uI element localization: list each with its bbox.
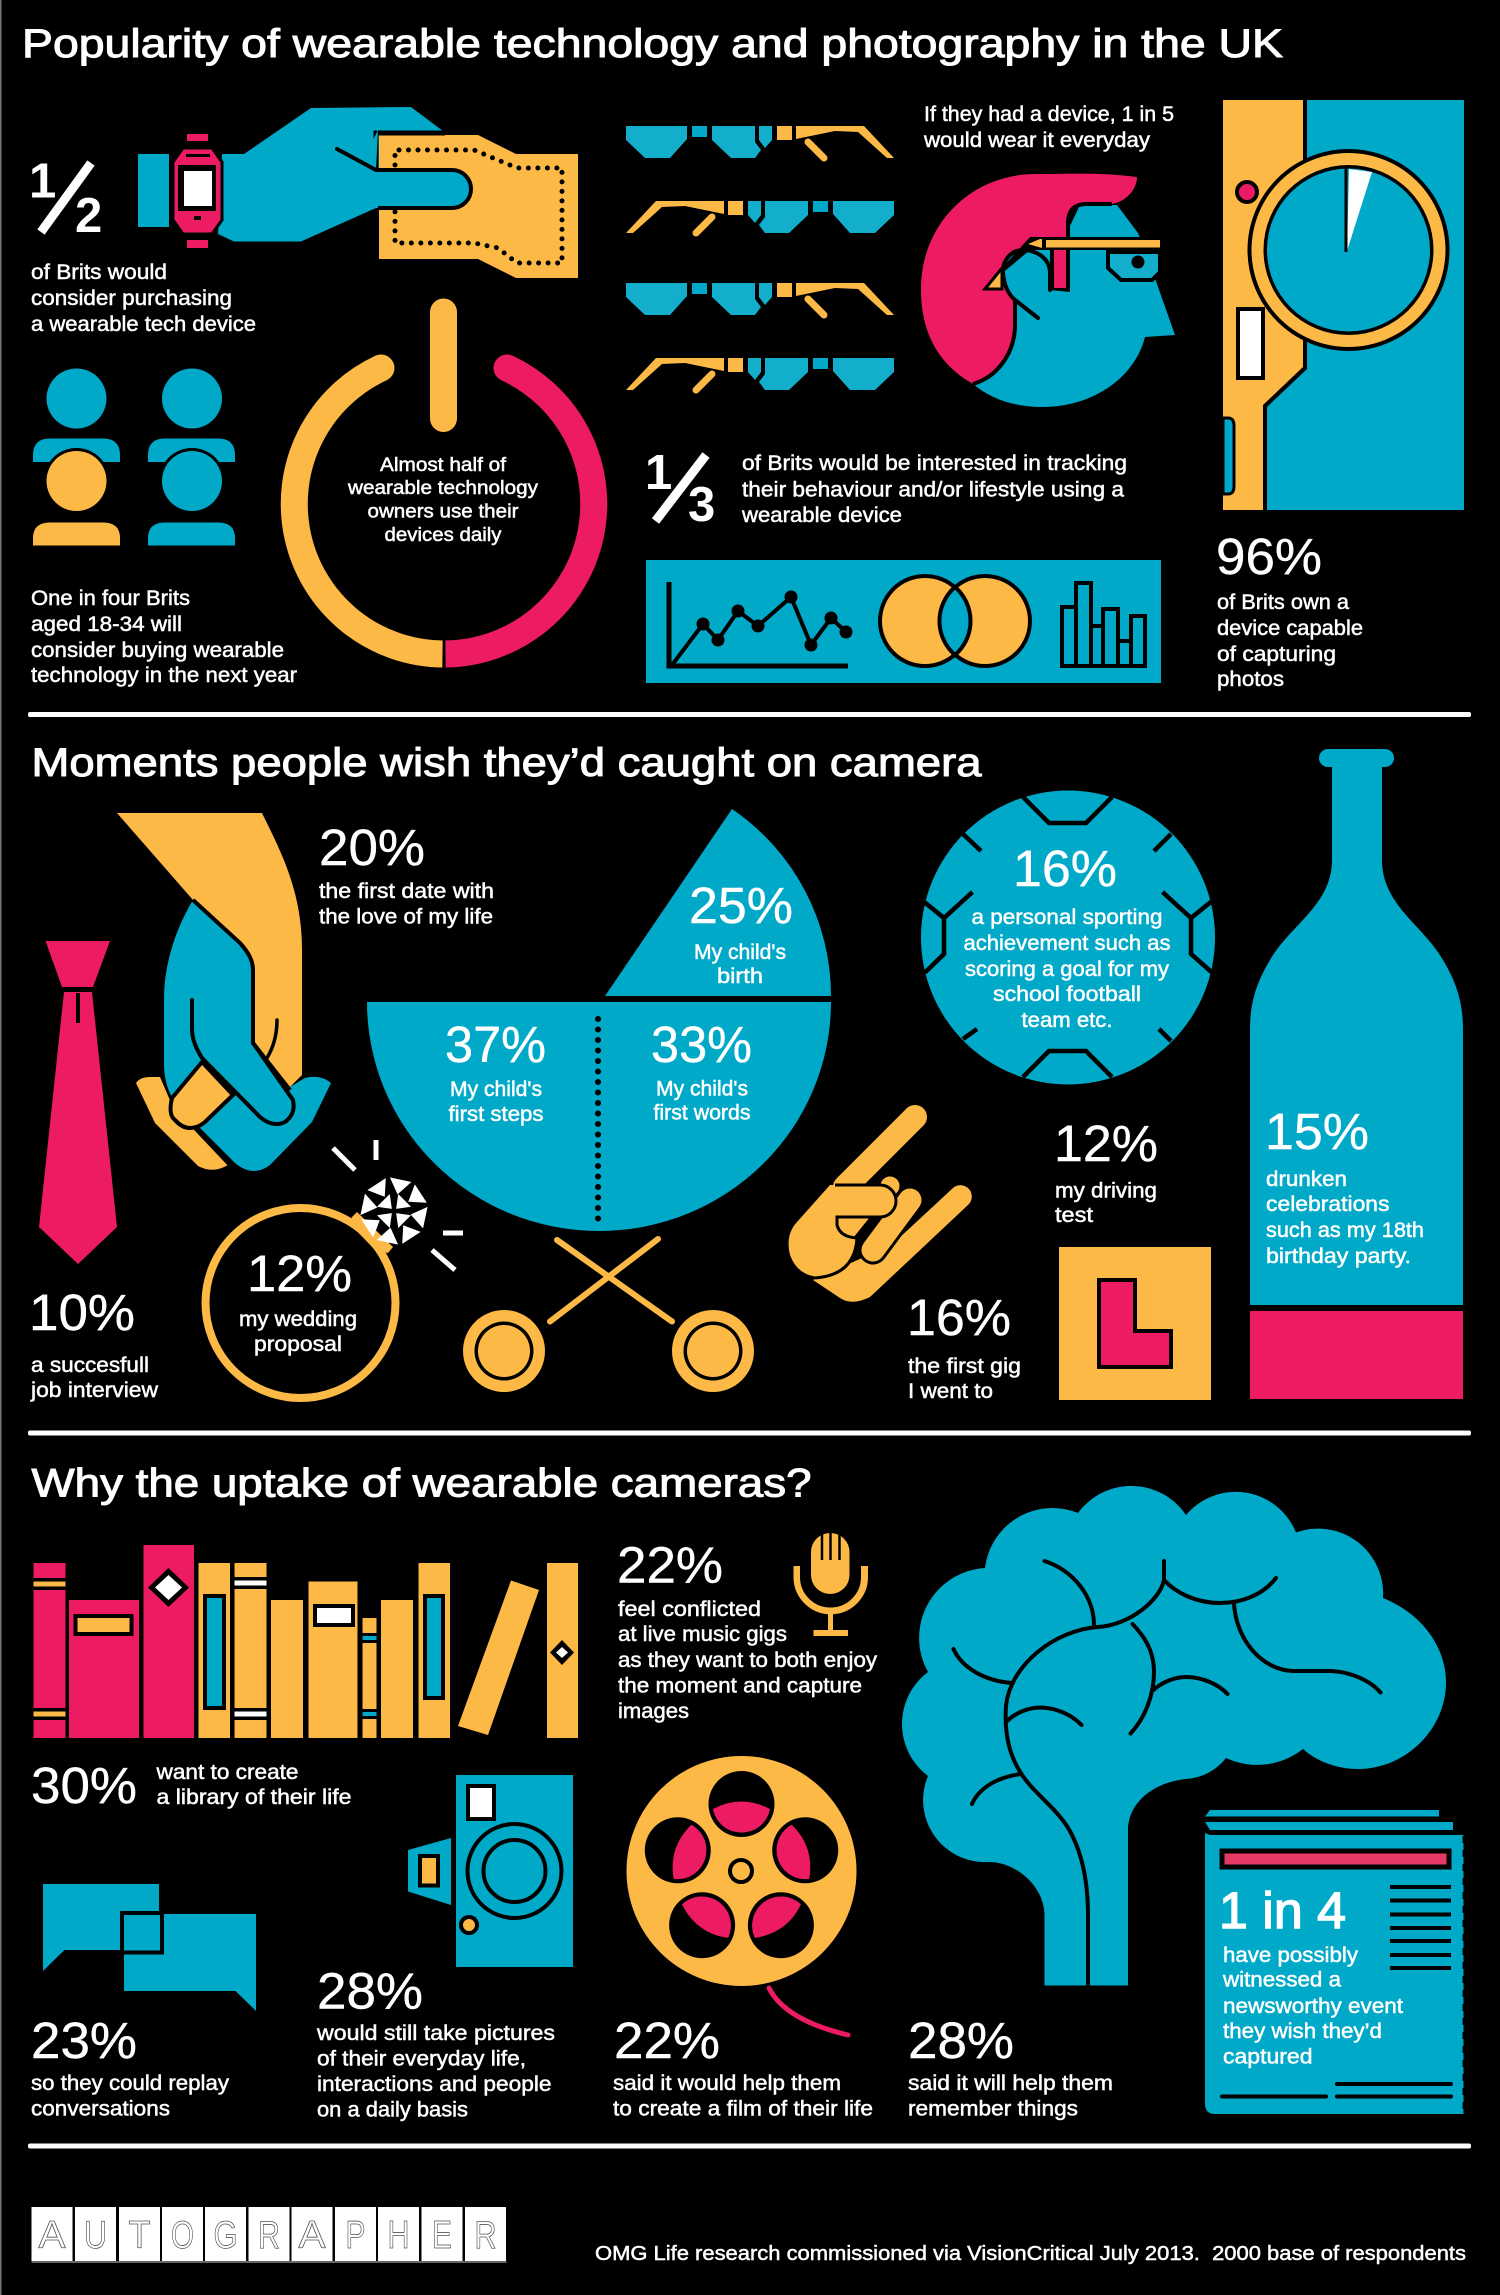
icon: newspaper: [1205, 1810, 1465, 2114]
stat: 12 percent driving test: test: [1055, 1204, 1093, 1227]
text: daily use: Almost half of: [380, 455, 507, 476]
icon: head wearing smart glasses: [921, 174, 1175, 407]
stat: 16 percent sporting achievement: a personal sporting: [972, 906, 1162, 929]
stat: 16 percent sporting achievement: scoring a goal for my: [965, 958, 1170, 981]
stat: 12 percent wedding proposal: [239, 1245, 357, 1356]
stat: 25 percent birth: My child's: [694, 941, 786, 964]
stat: 1 in 4 newsworthy event: captured: [1223, 2046, 1312, 2068]
stat: 1 in 4 newsworthy event: [1219, 1882, 1403, 2068]
stat: 33 percent first words: first words: [654, 1102, 750, 1124]
text: daily use: wearable technology: [347, 478, 539, 499]
stat: 20 percent first date: 20%: [319, 819, 425, 876]
footer: source note: OMG Life research commissioned via VisionCritical July 2013. 2000 base of respondents: [595, 2243, 1466, 2265]
heading: moments: Moments people wish they’d caught on camera: [32, 741, 982, 785]
stat: 22 percent live music gigs: feel conflicted: [618, 1598, 761, 1621]
stat: 22 percent live music gigs: [617, 1536, 878, 1723]
icon: speech bubbles: [43, 1884, 256, 2011]
icon: necktie: [39, 941, 117, 1264]
stat: 30 percent library: [31, 1757, 352, 1814]
stat: 30 percent library: 30%: [31, 1757, 137, 1814]
text: one in five wear everyday: [923, 103, 1174, 152]
icon: microphone: [794, 1532, 867, 1636]
logo: Autographer: O: [171, 2214, 194, 2257]
icon: baby pram shaped pie chart: [367, 809, 831, 1392]
text: one in four Brits: One in four Brits: [31, 587, 190, 610]
stat: 16 percent sporting achievement: achievement such as: [964, 932, 1170, 955]
text: tracking behaviour: their behaviour and/or lifestyle using a: [742, 478, 1124, 502]
stat: 22 percent live music gigs: 22%: [617, 1536, 723, 1594]
text: tracking behaviour: [741, 452, 1127, 527]
logo: Autographer: T: [128, 2214, 150, 2257]
stat: 25 percent birth: 25%: [689, 877, 793, 934]
stat: 37 percent first steps: first steps: [448, 1103, 544, 1126]
stat: 16 percent sporting achievement: 16%: [1013, 840, 1117, 897]
panel: wearable technology popularity: [29, 100, 1464, 691]
stat: 1 in 4 newsworthy event: have possibly: [1223, 1944, 1359, 1967]
stat: 33 percent first words: [651, 1016, 752, 1124]
logo: Autographer: A: [298, 2214, 326, 2257]
icon: wearable camera: [408, 1775, 573, 1967]
stat: 22 percent live music gigs: images: [618, 1700, 689, 1723]
stat: 1 in 4 newsworthy event: witnessed a: [1222, 1968, 1341, 1992]
stat: 16 percent sporting achievement: school football: [993, 983, 1141, 1006]
line chart: [669, 582, 852, 666]
icon: four people, one in four: [33, 368, 235, 546]
stat: 37 percent first steps: [445, 1016, 546, 1126]
stat: 20 percent first date: the love of my life: [319, 906, 493, 928]
logo: Autographer: G: [214, 2214, 238, 2257]
stat: 12 percent driving test: [1054, 1115, 1158, 1227]
text: purchasing wearable tech: of Brits would: [31, 261, 167, 284]
stat: 25 percent birth: birth: [717, 965, 763, 988]
stat: 33 percent first words: My child's: [656, 1078, 748, 1100]
stat: 37 percent first steps: 37%: [445, 1016, 546, 1073]
stat: 10 percent job interview: job interview: [30, 1379, 159, 1402]
stat: 28 percent remember things: remember things: [908, 2098, 1078, 2120]
stat: 22 percent film of their life: 22%: [614, 2012, 720, 2069]
bar chart: [1062, 583, 1145, 666]
fraction one third: [645, 446, 715, 532]
stat: 33 percent first words: 33%: [651, 1016, 752, 1073]
icon: holding hands: [117, 813, 331, 1171]
logo: Autographer: A: [38, 2214, 66, 2257]
stat: 12 percent wedding proposal: 12%: [247, 1245, 352, 1302]
text: daily use: owners use their: [368, 502, 519, 522]
icon: power button ring: [294, 312, 594, 654]
icon: brain: [902, 1486, 1446, 1986]
stat: 28 percent everyday pictures: on a daily basis: [317, 2098, 468, 2122]
stat: 23 percent replay conversations: 23%: [31, 2012, 137, 2069]
text: tracking behaviour: wearable device: [741, 504, 902, 527]
venn diagram: [880, 576, 1030, 666]
logo: Autographer: H: [388, 2214, 410, 2257]
icon: football: [921, 790, 1215, 1084]
text: purchasing wearable tech: consider purchasing: [31, 287, 232, 310]
pram frame and wheels: [463, 1239, 754, 1392]
text: tracking behaviour: of Brits would be interested in tracking: [742, 452, 1127, 475]
stat: 10 percent job interview: [29, 1284, 159, 1402]
stat: 96 percent: 96%: [1216, 528, 1322, 585]
stat: 1 in 4 newsworthy event: they wish they’d: [1223, 2020, 1382, 2043]
stat: 23 percent replay conversations: so they could replay: [31, 2072, 230, 2095]
fraction one half: 1: [29, 154, 56, 208]
stat: 10 percent job interview: 10%: [29, 1284, 135, 1341]
fraction one half: 2: [75, 189, 102, 243]
icon: champagne bottle: [1250, 749, 1463, 1399]
icon: diamond ring: [206, 1140, 463, 1398]
stat: 96 percent: photos: [1217, 668, 1284, 691]
stat: 12 percent driving test: my driving: [1055, 1180, 1157, 1202]
stat: 23 percent replay conversations: [31, 2012, 230, 2120]
panel: charts strip: [646, 560, 1161, 683]
fraction one third: 3: [688, 478, 715, 532]
icon: bookshelf: [34, 1545, 578, 1738]
stat: 28 percent everyday pictures: interactions and people: [317, 2073, 552, 2096]
stat: 20 percent first date: [319, 819, 494, 928]
stat: 22 percent film of their life: [613, 2012, 873, 2120]
stat: 37 percent first steps: My child's: [450, 1078, 542, 1101]
stat: 15 percent drunken celebrations: 15%: [1265, 1103, 1369, 1160]
title: Popularity of wearable technology and photography in the UK: [22, 22, 1283, 66]
stat: 96 percent: of capturing: [1217, 643, 1336, 666]
stat: 16 percent sporting achievement: team etc.: [1022, 1009, 1112, 1032]
text: one in four Brits: [31, 587, 297, 687]
stat: 28 percent remember things: [908, 2012, 1113, 2120]
icon: rows of smart glasses: [626, 126, 894, 390]
stat: 1 in 4 newsworthy event: newsworthy event: [1223, 1995, 1403, 2018]
text: daily use: [347, 455, 539, 546]
stat: 22 percent live music gigs: the moment and capture: [618, 1674, 862, 1698]
stat: 22 percent film of their life: to create a film of their life: [613, 2098, 873, 2120]
stat: 16 percent first gig: I went to: [908, 1380, 993, 1403]
stat: 16 percent first gig: the first gig: [908, 1355, 1021, 1378]
stat: 30 percent library: want to create: [155, 1761, 298, 1784]
panel: moments people wish they'd caught: [29, 749, 1463, 1403]
stat: 96 percent: [1216, 528, 1363, 691]
text: daily use: devices daily: [384, 525, 502, 546]
logo: Autographer: P: [346, 2214, 366, 2257]
stat: 96 percent: device capable: [1217, 617, 1363, 640]
icon: hand with smartwatch and wallet: [138, 107, 578, 278]
stat: 28 percent everyday pictures: of their everyday life,: [317, 2048, 526, 2070]
stat: 10 percent job interview: a succesfull: [31, 1354, 149, 1377]
stat: 15 percent drunken celebrations: [1265, 1103, 1424, 1268]
text: one in four Brits: aged 18-34 will: [31, 613, 182, 636]
icon: film reel: [626, 1756, 856, 2035]
stat: 22 percent film of their life: said it would help them: [613, 2072, 841, 2095]
stat: 15 percent drunken celebrations: drunken: [1266, 1168, 1347, 1191]
stat: 12 percent wedding proposal: my wedding: [239, 1308, 357, 1331]
stat: 28 percent remember things: 28%: [908, 2012, 1014, 2069]
stat: 22 percent live music gigs: as they want to both enjoy: [618, 1649, 878, 1672]
icon: camera lens close-up: [1223, 100, 1464, 510]
stat: 30 percent library: a library of their life: [156, 1786, 352, 1809]
text: one in four Brits: technology in the next year: [31, 664, 297, 687]
stat: 16 percent sporting achievement: [964, 840, 1170, 1032]
text: purchasing wearable tech: a wearable tech device: [31, 313, 256, 336]
logo: Autographer: R: [474, 2214, 496, 2257]
logo: Autographer: E: [432, 2214, 452, 2257]
stat: 25 percent birth: [689, 877, 793, 988]
stat: 16 percent first gig: [907, 1289, 1021, 1403]
logo: Autographer: R: [258, 2214, 280, 2257]
stat: 23 percent replay conversations: conversations: [31, 2098, 170, 2120]
stat: 15 percent drunken celebrations: such as my 18th: [1266, 1219, 1424, 1242]
stat: 96 percent: of Brits own a: [1217, 591, 1349, 614]
text: one in five wear everyday: would wear it everyday: [923, 129, 1151, 152]
logo: Autographer: [32, 2207, 506, 2263]
stat: 15 percent drunken celebrations: celebrations: [1266, 1193, 1390, 1216]
heading: why the uptake: Why the uptake of wearable cameras?: [32, 1462, 812, 1506]
stat: 15 percent drunken celebrations: birthday party.: [1266, 1245, 1411, 1268]
stat: 1 in 4 newsworthy event: 1 in 4: [1219, 1882, 1346, 1939]
text: one in four Brits: consider buying wearable: [31, 639, 284, 662]
stat: 12 percent driving test: 12%: [1054, 1115, 1158, 1172]
fraction one third: 1: [645, 446, 672, 500]
icon: rock hand sign: [789, 1117, 972, 1302]
logo: Autographer: U: [84, 2214, 107, 2257]
icon: learner L plate: [1059, 1247, 1211, 1400]
fraction one half: [29, 154, 102, 243]
stat: 28 percent remember things: said it will help them: [908, 2072, 1113, 2095]
stat: 28 percent everyday pictures: would still take pictures: [316, 2022, 555, 2045]
text: purchasing wearable tech: [31, 261, 256, 336]
stat: 28 percent everyday pictures: 28%: [317, 1962, 423, 2020]
panel: why the uptake of wearable cameras: [31, 1486, 1465, 2122]
stat: 22 percent live music gigs: at live music gigs: [618, 1623, 787, 1646]
stat: 28 percent everyday pictures: [316, 1962, 555, 2122]
text: one in five wear everyday: If they had a device, 1 in 5: [924, 103, 1174, 126]
stat: 12 percent wedding proposal: proposal: [254, 1333, 342, 1356]
stat: 16 percent first gig: 16%: [907, 1289, 1011, 1346]
stat: 20 percent first date: the first date with: [319, 880, 494, 903]
